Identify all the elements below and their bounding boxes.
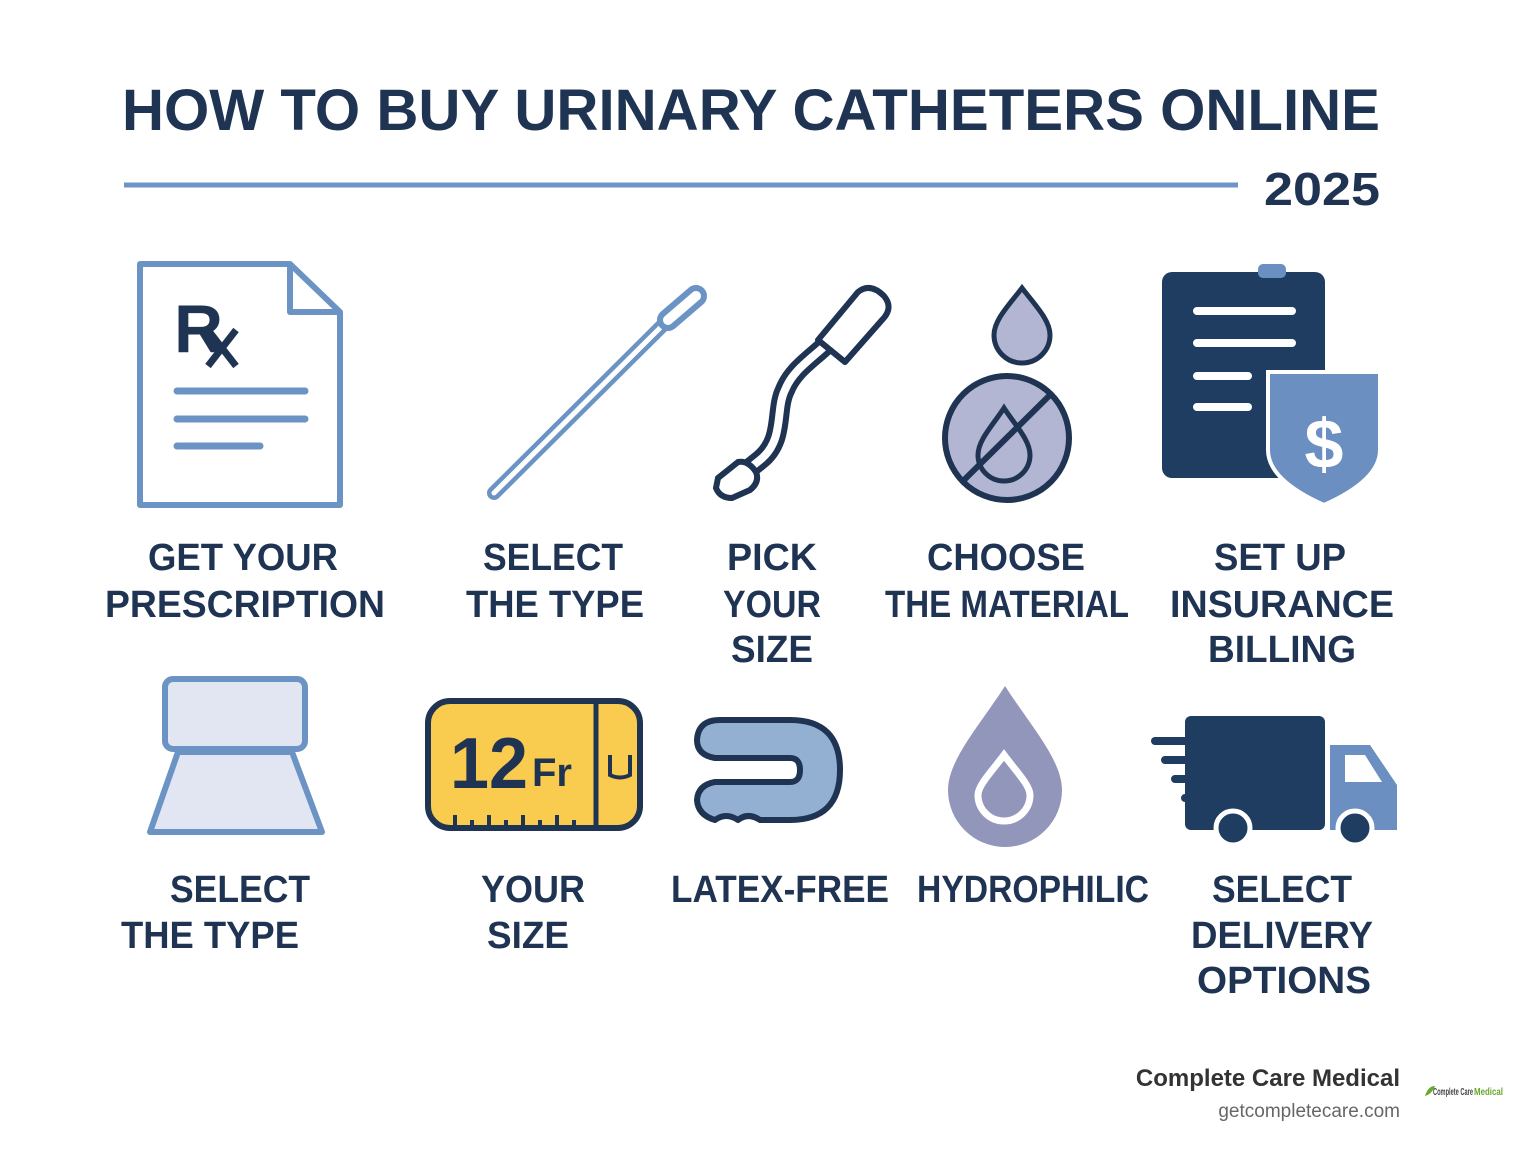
- labels row 1: [105, 537, 1394, 671]
- labels row 2: SIZE: [487, 915, 569, 957]
- icon: hydrophilic drop: [948, 686, 1062, 847]
- labels row 1: SELECT: [483, 537, 623, 579]
- labels row 1: THE TYPE: [466, 584, 644, 626]
- icon: ruler 12 Fr: 12: [450, 724, 528, 804]
- labels row 1: INSURANCE: [1170, 584, 1394, 626]
- icon: material: [945, 288, 1069, 500]
- labels row 2: HYDROPHILIC: [917, 869, 1149, 911]
- labels row 1: GET YOUR: [148, 537, 338, 579]
- footer brand: [1136, 1065, 1400, 1122]
- labels row 2: OPTIONS: [1197, 960, 1371, 1002]
- icon: curved catheter: [716, 288, 889, 498]
- labels row 1: SET UP: [1214, 537, 1346, 579]
- labels row 1: PICK: [727, 537, 818, 579]
- icon: insurance: [1162, 264, 1380, 505]
- icon: select type (row 2): [150, 679, 322, 832]
- labels row 1: YOUR: [723, 584, 821, 626]
- labels row 1: SIZE: [731, 629, 813, 671]
- labels row 2: YOUR: [481, 869, 585, 911]
- logo: Complete Care: [1433, 1087, 1473, 1098]
- icon: prescription: R: [174, 291, 223, 367]
- labels row 2: [121, 869, 1373, 1002]
- logo: Medical: [1474, 1087, 1503, 1098]
- labels row 1: CHOOSE: [927, 537, 1085, 579]
- labels row 2: LATEX-FREE: [671, 869, 889, 911]
- labels row 2: THE TYPE: [121, 915, 299, 957]
- year: 2025: [1264, 163, 1380, 215]
- labels row 2: SELECT: [1212, 869, 1352, 911]
- icon: ruler 12 Fr: Fr: [532, 751, 572, 795]
- labels row 1: THE MATERIAL: [885, 584, 1129, 626]
- icon: prescription: [140, 264, 340, 505]
- icon: insurance: $: [1305, 405, 1343, 483]
- footer brand: Complete Care Medical: [1136, 1065, 1400, 1092]
- title: HOW TO BUY URINARY CATHETERS ONLINE: [122, 78, 1380, 143]
- icon: ruler 12 Fr: [428, 701, 640, 828]
- labels row 1: BILLING: [1208, 629, 1356, 671]
- labels row 1: PRESCRIPTION: [105, 584, 385, 626]
- footer brand: getcompletecare.com: [1218, 1101, 1400, 1122]
- icon: delivery truck: [1155, 716, 1397, 845]
- icon: latex-free: [697, 720, 840, 820]
- icon: straight catheter: [494, 296, 696, 493]
- labels row 2: SELECT: [170, 869, 310, 911]
- labels row 2: DELIVERY: [1191, 915, 1373, 957]
